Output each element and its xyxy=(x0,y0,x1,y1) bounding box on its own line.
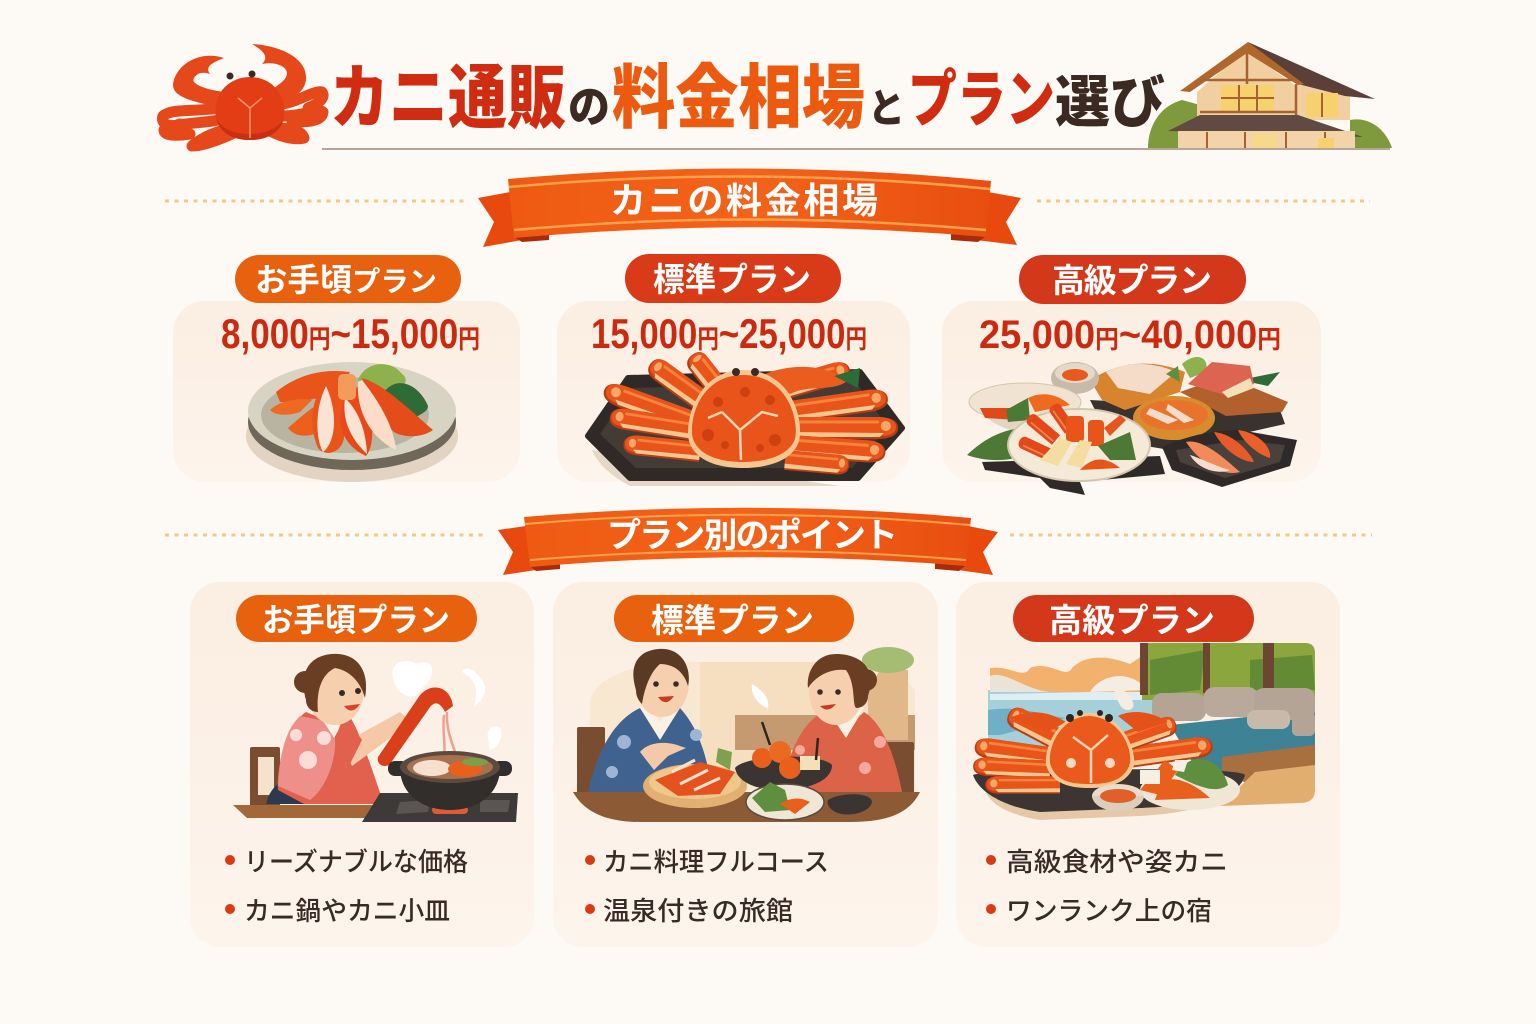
dotted rule: bottom left xyxy=(165,534,486,536)
title: 料金相場 xyxy=(612,59,865,137)
dotted rule: top left xyxy=(165,200,466,202)
pill: お手頃プラン xyxy=(235,255,461,303)
illustration: crab with hot spring view xyxy=(973,643,1315,820)
bullet list: カニ鍋やカニ小皿 xyxy=(244,896,450,926)
title: と xyxy=(868,87,905,131)
bullet list: カニ料理フルコース xyxy=(603,847,829,877)
panel: affordable price xyxy=(173,255,520,482)
pill: 高級プラン: 高級プラン xyxy=(1052,262,1212,299)
pill: 標準プラン xyxy=(625,254,841,303)
title xyxy=(330,59,1165,137)
pill: 標準プラン: 標準プラン xyxy=(653,261,811,298)
pill: お手頃プラン xyxy=(236,595,477,642)
illustration: crab legs on plate xyxy=(246,362,458,482)
panel: luxury plan points xyxy=(956,582,1340,947)
illustration: couple dining at ryokan xyxy=(573,647,920,822)
ribbon: プラン別のポイント: プラン別のポイント xyxy=(607,517,898,555)
panel: standard price xyxy=(557,254,910,486)
ribbon: カニの料金相場 xyxy=(478,168,1021,247)
pill: 標準プラン xyxy=(614,595,854,642)
pill: 高級プラン: 高級プラン xyxy=(1049,602,1215,639)
bullet list xyxy=(585,847,829,926)
pill: お手頃プラン: お手頃プラン xyxy=(255,262,437,298)
icon: title crab xyxy=(162,44,323,146)
bullet list: 温泉付きの旅館 xyxy=(603,896,793,926)
title: 選び xyxy=(1055,71,1165,134)
bullet list: リーズナブルな価格 xyxy=(244,847,468,877)
pill: 高級プラン xyxy=(1019,255,1246,304)
illustration: whole crab on dark tray xyxy=(588,348,902,486)
pill: 標準プラン: 標準プラン xyxy=(651,602,814,639)
title: カニ通販 xyxy=(330,59,566,137)
panel: affordable plan points xyxy=(190,582,534,947)
illustration: luxury crab feast xyxy=(967,357,1297,495)
price: 25,000円~40,000円: 25,000円~40,000円 xyxy=(979,313,1281,357)
pill: お手頃プラン: お手頃プラン xyxy=(262,602,450,638)
bullet list xyxy=(986,847,1228,926)
price: 8,000円~15,000円: 8,000円~15,000円 xyxy=(221,310,480,357)
title underline xyxy=(322,148,1390,150)
panel: luxury price xyxy=(942,255,1321,495)
bullet list: 高級食材や姿カニ xyxy=(1006,847,1228,877)
dotted rule: top right xyxy=(1037,200,1370,202)
panel: standard plan points xyxy=(553,582,938,947)
ribbon: カニの料金相場: カニの料金相場 xyxy=(610,180,878,221)
title: の xyxy=(568,83,610,132)
bullet list xyxy=(225,847,468,926)
title: プラン xyxy=(908,66,1055,135)
illustration: woman with crab hot pot xyxy=(233,654,518,822)
ribbon: プラン別のポイント xyxy=(498,508,998,575)
dotted rule: bottom right xyxy=(1010,534,1372,536)
bullet list: ワンランク上の宿 xyxy=(1006,896,1212,926)
pill: 高級プラン xyxy=(1013,595,1254,642)
icon: ryokan house xyxy=(1148,42,1392,148)
price: 15,000円~25,000円: 15,000円~25,000円 xyxy=(591,310,867,357)
